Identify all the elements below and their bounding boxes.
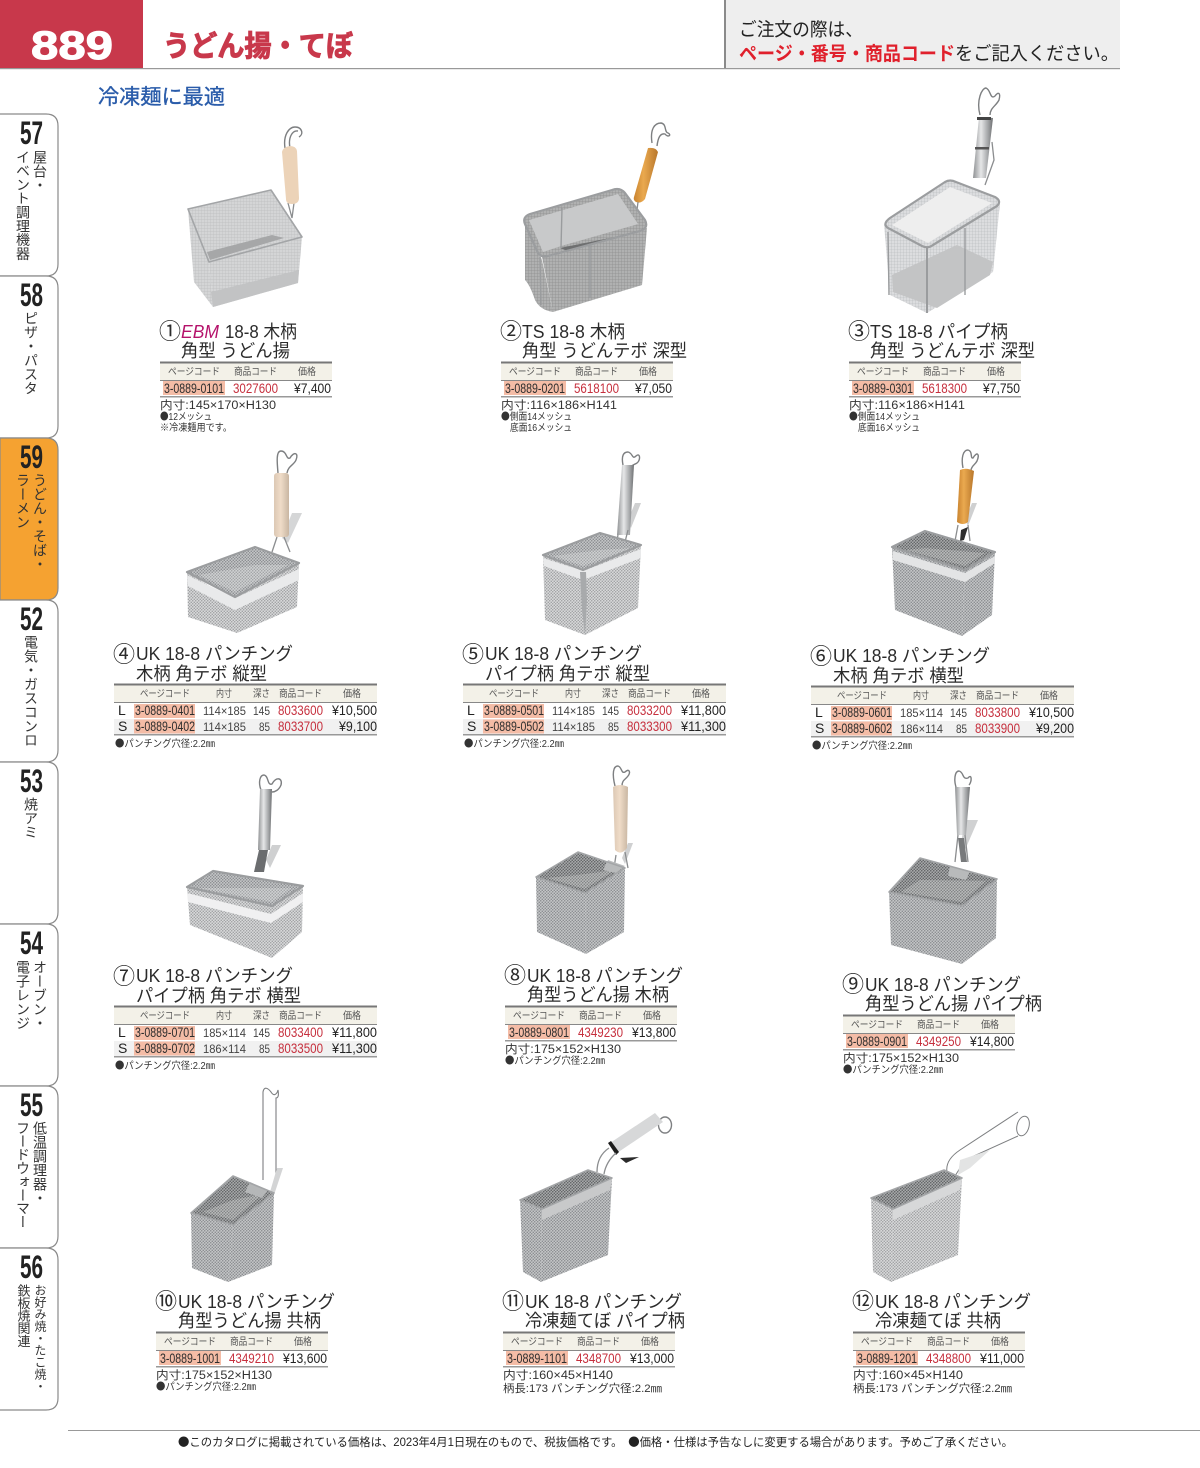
- tab 55: 低温調理器・: [32, 1121, 48, 1205]
- photo: basket 8: [536, 766, 633, 954]
- product 3 notes: 内寸:116×186×H141: [849, 398, 965, 412]
- photo: basket 7: [187, 775, 303, 958]
- product 8 title: 角型うどん揚 木柄: [527, 985, 669, 1005]
- product 6 price table: 3-0889-0602: [832, 721, 892, 736]
- product 5 price table: 8033300: [627, 719, 672, 734]
- product 7 price table: 3-0889-0701: [135, 1025, 195, 1040]
- product 6 price table: 8033900: [975, 721, 1020, 736]
- product 11 price table: ¥13,000: [629, 1350, 674, 1366]
- product 7: [113, 959, 377, 1072]
- product 3 price table: 商品コード: [923, 365, 966, 378]
- tab 53: 53: [20, 763, 43, 799]
- product 5 price table: 商品コード: [628, 687, 671, 700]
- product 3 title: 角型 うどんテボ 深型: [870, 341, 1035, 361]
- product 5 price table: L: [467, 702, 475, 718]
- product 7 price table: 価格: [343, 1009, 361, 1022]
- product 3 price table: ページコード: [857, 367, 909, 378]
- product 5 price table: 深さ: [602, 688, 619, 700]
- order notice panel: ご注文の際は、: [739, 19, 863, 40]
- product 11 price table: 3-0889-1101: [507, 1351, 567, 1366]
- product 6 title: 木柄 角テボ 横型: [833, 666, 964, 686]
- product 4 title: UK 18-8 パンチング: [136, 644, 293, 664]
- product 9 price table: 4349250: [916, 1034, 961, 1049]
- product 11 title: 冷凍麺てぼ パイプ柄: [525, 1311, 685, 1331]
- page number block: 889: [31, 24, 113, 68]
- product 11 price table: [503, 1332, 675, 1368]
- product 11 price table: 価格: [641, 1335, 659, 1348]
- product 7 price table: 8033400: [278, 1025, 323, 1040]
- tab 53: [0, 762, 58, 924]
- product 6 price table: ¥10,500: [1028, 704, 1074, 720]
- product 6 price table: 3-0889-0601: [832, 705, 892, 720]
- order notice panel: をご記入ください。: [955, 43, 1119, 64]
- product 3 title: TS 18-8 パイプ柄: [870, 322, 1008, 342]
- product 2 price table: ¥7,050: [634, 380, 672, 396]
- product 12 price table: 価格: [991, 1335, 1009, 1348]
- product 4 price table: 85: [259, 720, 270, 734]
- photo: basket 3: [884, 88, 1000, 313]
- product 5 price table: 内寸: [565, 687, 581, 700]
- product 11 notes: [503, 1368, 662, 1395]
- product 12: [852, 1284, 1031, 1395]
- product 6 title: ⑥: [810, 639, 832, 671]
- product 3 title: ③: [848, 314, 870, 346]
- product 10 title: ⑩: [155, 1284, 177, 1316]
- product 1 title: [159, 314, 297, 361]
- product 9 title: UK 18-8 パンチング: [865, 975, 1021, 995]
- product 5 price table: ページコード: [489, 689, 539, 700]
- product 6 title: [810, 639, 990, 686]
- product 2 title: TS 18-8 木柄: [522, 322, 625, 342]
- product 12 title: UK 18-8 パンチング: [875, 1292, 1031, 1312]
- tab 59 active: ラーメン: [15, 473, 31, 529]
- product 2 price table: 5618100: [574, 381, 619, 396]
- product 8 price table: 4349230: [578, 1025, 623, 1040]
- photo: basket 12: [871, 1112, 1031, 1282]
- tab 58: 58: [20, 277, 43, 313]
- product 1 notes: 内寸:145×170×H130: [160, 398, 276, 412]
- product 8 price table: ¥13,800: [631, 1024, 676, 1040]
- photo: basket 9: [889, 771, 997, 964]
- product 10 price table: 商品コード: [230, 1335, 273, 1348]
- tab 59 active: うどん・そば・: [32, 473, 48, 571]
- tab 56: [0, 1248, 58, 1410]
- product 9 price table: 価格: [981, 1018, 999, 1031]
- product 8: [504, 958, 683, 1067]
- product 8 title: ⑧: [504, 958, 526, 990]
- product 9 title: ⑨: [842, 967, 864, 999]
- product 4 price table: 8033600: [278, 703, 323, 718]
- tab 52: 52: [20, 601, 43, 637]
- product 12 price table: ページコード: [861, 1337, 913, 1348]
- tab 54: [0, 924, 58, 1086]
- product 6 price table: 価格: [1040, 689, 1058, 702]
- product 5 price table: 8033200: [627, 703, 672, 718]
- product 5 price table: 85: [608, 720, 619, 734]
- product 7 title: ⑦: [113, 959, 135, 991]
- product 5 price table: 114×185: [552, 704, 595, 718]
- product 11 price table: 商品コード: [577, 1335, 620, 1348]
- order notice panel: ページ・番号・商品コード: [739, 43, 955, 65]
- tab 58: [0, 276, 58, 438]
- product 2 notes: 底面16メッシュ: [510, 422, 572, 434]
- product 7 title: [113, 959, 301, 1006]
- product 12 notes: 内寸:160×45×H140: [853, 1368, 963, 1382]
- product 6 note: ●パンチング穴径:2.2㎜: [812, 737, 912, 752]
- product 9 title: [842, 967, 1042, 1014]
- product 4 price table: 価格: [343, 687, 361, 700]
- product 4 price table: 3-0889-0402: [135, 719, 195, 734]
- product 1 price table: 3-0889-0101: [164, 381, 224, 396]
- photo: basket 6: [892, 450, 995, 636]
- product 1 title: 角型 うどん揚: [181, 341, 290, 361]
- product 5 price table: 価格: [692, 687, 710, 700]
- product 7 price table: 185×114: [203, 1026, 246, 1040]
- product 4 price table: 8033700: [278, 719, 323, 734]
- product 10 title: UK 18-8 パンチング: [178, 1292, 335, 1312]
- product 2 notes: ●側面14メッシュ: [501, 408, 572, 423]
- product 7 price table: [114, 1006, 377, 1058]
- product 11 title: [502, 1284, 685, 1331]
- product 1 notes: ●12メッシュ: [160, 408, 212, 423]
- tab 52: [0, 600, 58, 762]
- product 2 price table: 価格: [639, 365, 657, 378]
- product 7 price table: 8033500: [278, 1041, 323, 1056]
- product 4 price table: 3-0889-0401: [135, 703, 195, 718]
- tab 57: 屋台・: [32, 150, 48, 192]
- product 1 notes: ※冷凍麺用です。: [160, 421, 232, 434]
- product 7 price table: L: [118, 1024, 126, 1040]
- product 1 notes: [160, 398, 276, 434]
- product 7 price table: 85: [259, 1042, 270, 1056]
- photo: basket 11: [520, 1113, 672, 1282]
- footer note: ●このカタログに掲載されている価格は、2023年4月1日現在のもので、税抜価格です。 ●価格・仕様は予告なしに変更する場合があります。予めご了承ください。: [178, 1434, 1013, 1450]
- product 2 title: ②: [500, 314, 522, 346]
- product 2 price table: 3-0889-0201: [505, 381, 565, 396]
- product 7 note: ●パンチング穴径:2.2㎜: [115, 1057, 215, 1072]
- product 5: [462, 637, 726, 750]
- product 4: [113, 637, 377, 750]
- product 5 price table: 114×185: [552, 720, 595, 734]
- photo: basket 4: [187, 451, 302, 633]
- product 6 price table: 8033800: [975, 705, 1020, 720]
- product 4 title: 木柄 角テボ 縦型: [136, 664, 267, 684]
- product 5 price table: ¥11,800: [680, 702, 726, 718]
- product 5 price table: 145: [602, 704, 619, 718]
- product 3 price table: 5618300: [922, 381, 967, 396]
- order notice panel: [724, 0, 1120, 68]
- product 6 price table: 内寸: [913, 689, 929, 702]
- page number block: [0, 0, 143, 68]
- tab 57: 57: [20, 115, 43, 151]
- product 10 notes: 内寸:175×152×H130: [156, 1368, 272, 1382]
- product 7 price table: 深さ: [253, 1010, 270, 1022]
- product 5 title: パイプ柄 角テボ 縦型: [485, 664, 650, 684]
- product 6 price table: [811, 686, 1074, 738]
- product 7 title: パイプ柄 角テボ 横型: [136, 986, 301, 1006]
- product 11 notes: 柄長:173 パンチング穴径:2.2㎜: [503, 1381, 662, 1395]
- product 10 notes: [156, 1368, 272, 1393]
- product 11: [502, 1284, 685, 1395]
- product 9 notes: ●パンチング穴径:2.2㎜: [843, 1061, 943, 1076]
- product 4 price table: L: [118, 702, 126, 718]
- product 12 notes: 柄長:173 パンチング穴径:2.2㎜: [853, 1381, 1012, 1395]
- product 2 title: [500, 314, 687, 361]
- product 8 price table: [505, 1006, 677, 1042]
- product 7 price table: 186×114: [203, 1042, 246, 1056]
- product 4 price table: S: [118, 718, 127, 734]
- product 11 title: UK 18-8 パンチング: [525, 1292, 682, 1312]
- product 7 title: UK 18-8 パンチング: [136, 966, 293, 986]
- product 7 price table: 3-0889-0702: [135, 1041, 195, 1056]
- product 11 price table: ページコード: [511, 1337, 563, 1348]
- product 7 price table: ¥11,300: [331, 1040, 377, 1056]
- product 10 title: [155, 1284, 335, 1331]
- product 3 notes: ●側面14メッシュ: [849, 408, 920, 423]
- product 12 price table: 3-0889-1201: [857, 1351, 917, 1366]
- product 5 price table: ¥11,300: [680, 718, 726, 734]
- product 2: [500, 314, 687, 434]
- page header: [0, 0, 1120, 69]
- product 4 price table: [114, 684, 377, 736]
- product 8 notes: [505, 1042, 621, 1067]
- product 10 price table: ページコード: [164, 1337, 216, 1348]
- product 3 price table: [849, 362, 1021, 398]
- tab 56: お好み焼・たこ焼・: [33, 1284, 47, 1392]
- product 6 price table: 85: [956, 722, 967, 736]
- product 1 price table: 3027600: [233, 381, 278, 396]
- product 12 price table: [853, 1332, 1025, 1368]
- product 1 price table: 価格: [298, 365, 316, 378]
- product 3: [848, 314, 1035, 434]
- product 6 price table: ページコード: [837, 691, 887, 702]
- product 3 price table: ¥7,750: [982, 380, 1020, 396]
- tab 57: [0, 114, 58, 276]
- product 9 price table: 商品コード: [917, 1018, 960, 1031]
- product 10 price table: 4349210: [229, 1351, 274, 1366]
- product 3 notes: [849, 398, 965, 434]
- product 6 price table: 185×114: [900, 706, 943, 720]
- product 10 notes: ●パンチング穴径:2.2㎜: [156, 1378, 256, 1393]
- photo: basket 10: [191, 1088, 283, 1282]
- tab 55: フードウォーマー: [15, 1121, 31, 1228]
- tab 59 active: [0, 438, 58, 600]
- product 8 price table: 価格: [643, 1009, 661, 1022]
- product 3 title: [848, 314, 1035, 361]
- product 9 price table: 3-0889-0901: [847, 1034, 907, 1049]
- product 4 price table: ¥9,100: [338, 718, 377, 734]
- tab 55: [0, 1086, 58, 1248]
- product 1 price table: [160, 362, 332, 398]
- product 8 notes: ●パンチング穴径:2.2㎜: [505, 1052, 605, 1067]
- product 9 price table: ページコード: [851, 1020, 903, 1031]
- product 10 title: 角型うどん揚 共柄: [178, 1311, 321, 1331]
- product 2 price table: [501, 362, 673, 398]
- product 2 notes: 内寸:116×186×H141: [501, 398, 617, 412]
- product 10 price table: ¥13,600: [282, 1350, 327, 1366]
- product 6 price table: 186×114: [900, 722, 943, 736]
- product 2 notes: [501, 398, 617, 434]
- tab 52: 電気・ガスコンロ: [23, 635, 39, 747]
- product 8 title: [504, 958, 683, 1005]
- product 12 title: ⑫: [852, 1284, 874, 1316]
- product 2 price table: 商品コード: [575, 365, 618, 378]
- product 9 notes: [843, 1051, 959, 1076]
- product 11 price table: 4348700: [576, 1351, 621, 1366]
- product 1: [159, 314, 332, 434]
- product 7 price table: ¥11,800: [331, 1024, 377, 1040]
- product 7 price table: ページコード: [140, 1011, 190, 1022]
- product 5 note: ●パンチング穴径:2.2㎜: [464, 735, 564, 750]
- product 8 notes: 内寸:175×152×H130: [505, 1042, 621, 1056]
- product 4 price table: ¥10,500: [331, 702, 377, 718]
- product 4 price table: 商品コード: [279, 687, 322, 700]
- product 12 notes: [853, 1368, 1012, 1395]
- product 6 price table: 深さ: [950, 690, 967, 702]
- product 3 price table: 価格: [987, 365, 1005, 378]
- product 1 title: ①: [159, 314, 181, 346]
- tab 54: オーブン・: [32, 960, 48, 1030]
- product 4 price table: ページコード: [140, 689, 190, 700]
- product 9 notes: 内寸:175×152×H130: [843, 1051, 959, 1065]
- product 5 price table: S: [467, 718, 476, 734]
- tab 59 active: 59: [20, 439, 43, 475]
- product 1 title: 18-8 木柄: [225, 322, 297, 342]
- tab 56: 56: [20, 1249, 43, 1285]
- sidebar tabs: [0, 114, 58, 1410]
- product 12 price table: 4348800: [926, 1351, 971, 1366]
- product 10: [155, 1284, 335, 1393]
- product 4 price table: 145: [253, 704, 270, 718]
- product 6 title: UK 18-8 パンチング: [833, 646, 990, 666]
- product 6 price table: 145: [950, 706, 967, 720]
- product 1 price table: 商品コード: [234, 365, 277, 378]
- product 4 price table: 内寸: [216, 687, 232, 700]
- product 5 price table: [463, 684, 726, 736]
- product 8 price table: 商品コード: [579, 1009, 622, 1022]
- tab 56: 鉄板焼関連: [16, 1284, 30, 1349]
- section heading: 冷凍麺に最適: [98, 86, 225, 109]
- photo: basket 5: [543, 452, 641, 635]
- product 12 title: [852, 1284, 1031, 1331]
- product 9: [842, 967, 1042, 1076]
- product 6 price table: S: [815, 720, 824, 736]
- tab 57: イベント調理機器: [15, 150, 31, 261]
- photo: basket 2: [524, 123, 670, 312]
- product 7 price table: 商品コード: [279, 1009, 322, 1022]
- product 9 price table: ¥14,800: [969, 1033, 1014, 1049]
- product 11 title: ⑪: [502, 1284, 524, 1316]
- product 12 price table: 商品コード: [927, 1335, 970, 1348]
- product 5 title: ⑤: [462, 637, 484, 669]
- product 1 price table: ¥7,400: [293, 380, 331, 396]
- product 10 price table: 3-0889-1001: [160, 1351, 220, 1366]
- page title: うどん揚・てぼ: [163, 30, 353, 63]
- tab 55: 55: [20, 1087, 43, 1123]
- product 2 title: 角型 うどんテボ 深型: [522, 341, 687, 361]
- product 6 price table: ¥9,200: [1035, 720, 1074, 736]
- product 4 price table: 114×185: [203, 704, 246, 718]
- product 8 price table: 3-0889-0801: [509, 1025, 569, 1040]
- product 6 price table: L: [815, 704, 823, 720]
- product 8 price table: ページコード: [513, 1011, 565, 1022]
- tab 58: ピザ・パスタ: [23, 311, 39, 395]
- product 5 price table: 3-0889-0502: [484, 719, 544, 734]
- product 6 price table: 商品コード: [976, 689, 1019, 702]
- product 7 price table: 145: [253, 1026, 270, 1040]
- product 10 price table: [156, 1332, 328, 1368]
- tab 53: 焼アミ: [23, 797, 39, 839]
- product 9 price table: [843, 1014, 1015, 1050]
- product 3 price table: 3-0889-0301: [853, 381, 913, 396]
- product 7 price table: S: [118, 1040, 127, 1056]
- product 4 price table: 114×185: [203, 720, 246, 734]
- product 7 price table: 内寸: [216, 1009, 232, 1022]
- product 4 note: ●パンチング穴径:2.2㎜: [115, 735, 215, 750]
- tab 54: 電子レンジ: [15, 960, 31, 1030]
- product 1 price table: ページコード: [168, 367, 220, 378]
- photo: basket 1: [188, 127, 302, 307]
- product 6: [810, 639, 1074, 752]
- product 11 notes: 内寸:160×45×H140: [503, 1368, 613, 1382]
- product 12 title: 冷凍麺てぼ 共柄: [875, 1311, 1001, 1331]
- product 4 title: ④: [113, 637, 135, 669]
- tab 54: 54: [20, 925, 43, 961]
- product 8 title: UK 18-8 パンチング: [527, 966, 683, 986]
- product 5 title: UK 18-8 パンチング: [485, 644, 642, 664]
- product 4 price table: 深さ: [253, 688, 270, 700]
- product 2 price table: ページコード: [509, 367, 561, 378]
- product 12 price table: ¥11,000: [979, 1350, 1024, 1366]
- product 5 title: [462, 637, 650, 684]
- product 9 title: 角型うどん揚 パイプ柄: [865, 994, 1042, 1014]
- product 10 price table: 価格: [294, 1335, 312, 1348]
- product 5 price table: 3-0889-0501: [484, 703, 544, 718]
- product 4 title: [113, 637, 293, 684]
- product 1 title: EBM: [181, 322, 219, 342]
- product 3 notes: 底面16メッシュ: [858, 422, 920, 434]
